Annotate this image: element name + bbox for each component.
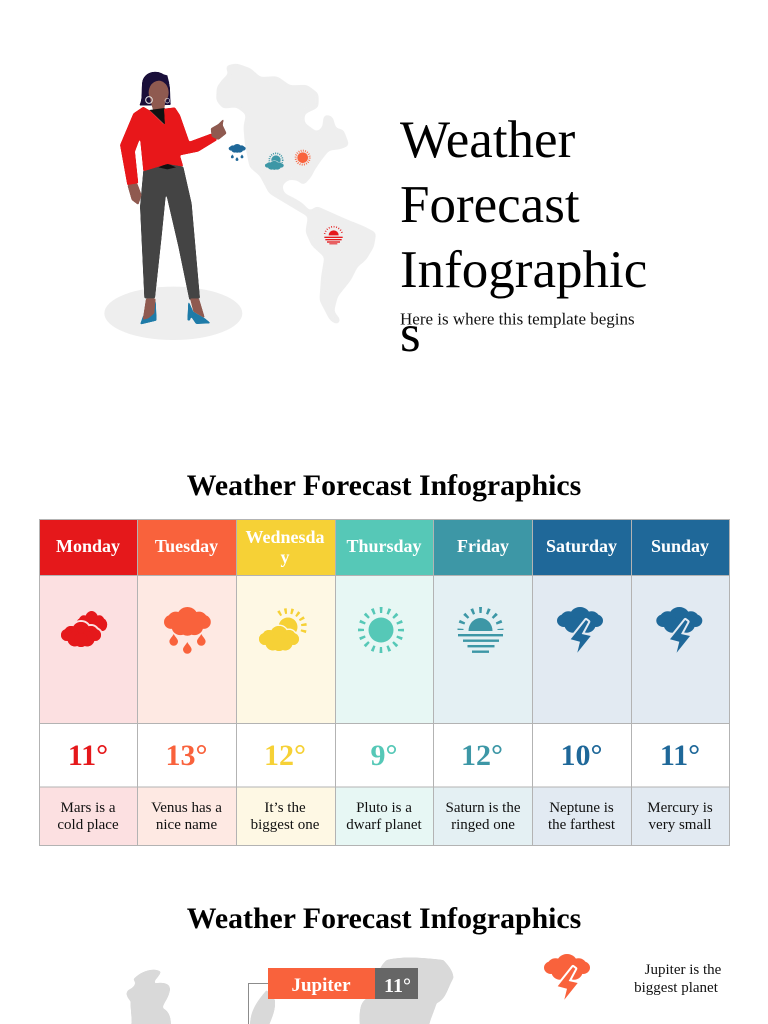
title: s xyxy=(400,305,421,363)
column: Saturday xyxy=(532,519,631,845)
heading: forecast table: Weather Forecast Infographics xyxy=(187,469,581,502)
map icon: partly cloudy xyxy=(265,153,284,170)
column: Tuesday: 13° xyxy=(166,739,208,772)
callout: Jupiter label: Jupiter xyxy=(291,975,351,996)
column: Monday: Mars is a xyxy=(60,800,116,816)
text block: Jupiter description: biggest planet xyxy=(634,980,719,996)
callout: Jupiter label xyxy=(248,968,418,1024)
column: Saturday: the farthest xyxy=(548,817,616,833)
column: Friday xyxy=(433,519,532,845)
column: Friday: Saturn is the xyxy=(446,800,521,816)
world map fragment xyxy=(113,957,453,1024)
column: Wednesday: biggest one xyxy=(251,817,320,833)
column: Monday: Monday xyxy=(56,536,120,556)
column: Saturday: Neptune is xyxy=(549,800,614,816)
column: Friday: 12° xyxy=(461,739,503,772)
title: Weather xyxy=(400,111,576,169)
column: Saturday: 10° xyxy=(560,739,602,772)
column: Friday: ringed one xyxy=(451,817,515,833)
heading: map section: Weather Forecast Infographics xyxy=(187,902,581,935)
column: Monday xyxy=(39,519,137,845)
column: Sunday: 11° xyxy=(660,739,700,772)
title: Forecast xyxy=(400,176,580,234)
column: Sunday xyxy=(631,519,730,845)
column: Saturday: Saturday xyxy=(546,536,617,556)
column: Sunday: very small xyxy=(649,817,711,833)
column: Tuesday: Venus has a xyxy=(151,800,222,816)
column: Thursday: Thursday xyxy=(346,536,422,556)
column: Tuesday xyxy=(137,519,236,845)
subtitle: Here is where this template begins xyxy=(400,310,635,328)
column: Wednesday: It’s the xyxy=(264,800,306,816)
column: Wednesday: Wednesda xyxy=(245,527,325,547)
map icon: sunset xyxy=(324,227,343,244)
column: Tuesday: Tuesday xyxy=(155,536,218,556)
column: Monday: 11° xyxy=(68,739,108,772)
icon: storm cloud xyxy=(544,954,590,1000)
text block: Jupiter description xyxy=(634,962,722,996)
column: Friday: Friday xyxy=(457,536,509,556)
column: Wednesday: y xyxy=(280,547,290,567)
column: Thursday: dwarf planet xyxy=(346,817,423,833)
illustration: woman presenting a weather map xyxy=(104,65,375,340)
title: Infographic xyxy=(400,241,647,299)
map icon: sun xyxy=(296,151,310,165)
text block: Jupiter description: Jupiter is the xyxy=(645,962,722,978)
ground shadow xyxy=(104,287,242,340)
column: Thursday xyxy=(335,519,433,845)
panel: weekly forecast table xyxy=(39,519,730,846)
column: Sunday: Mercury is xyxy=(647,800,713,816)
column: Tuesday: nice name xyxy=(156,817,217,833)
title xyxy=(400,111,647,363)
map of the Americas xyxy=(217,65,375,323)
column: Wednesday xyxy=(236,519,335,845)
column: Sunday: Sunday xyxy=(651,536,709,556)
map icon: rain cloud xyxy=(229,144,246,161)
callout: Jupiter label: 11° xyxy=(384,975,411,997)
column: Thursday: Pluto is a xyxy=(356,800,412,816)
column: Thursday: 9° xyxy=(370,739,398,772)
column: Wednesday: 12° xyxy=(264,739,306,772)
column: Monday: cold place xyxy=(57,817,119,833)
woman figure xyxy=(120,72,227,325)
